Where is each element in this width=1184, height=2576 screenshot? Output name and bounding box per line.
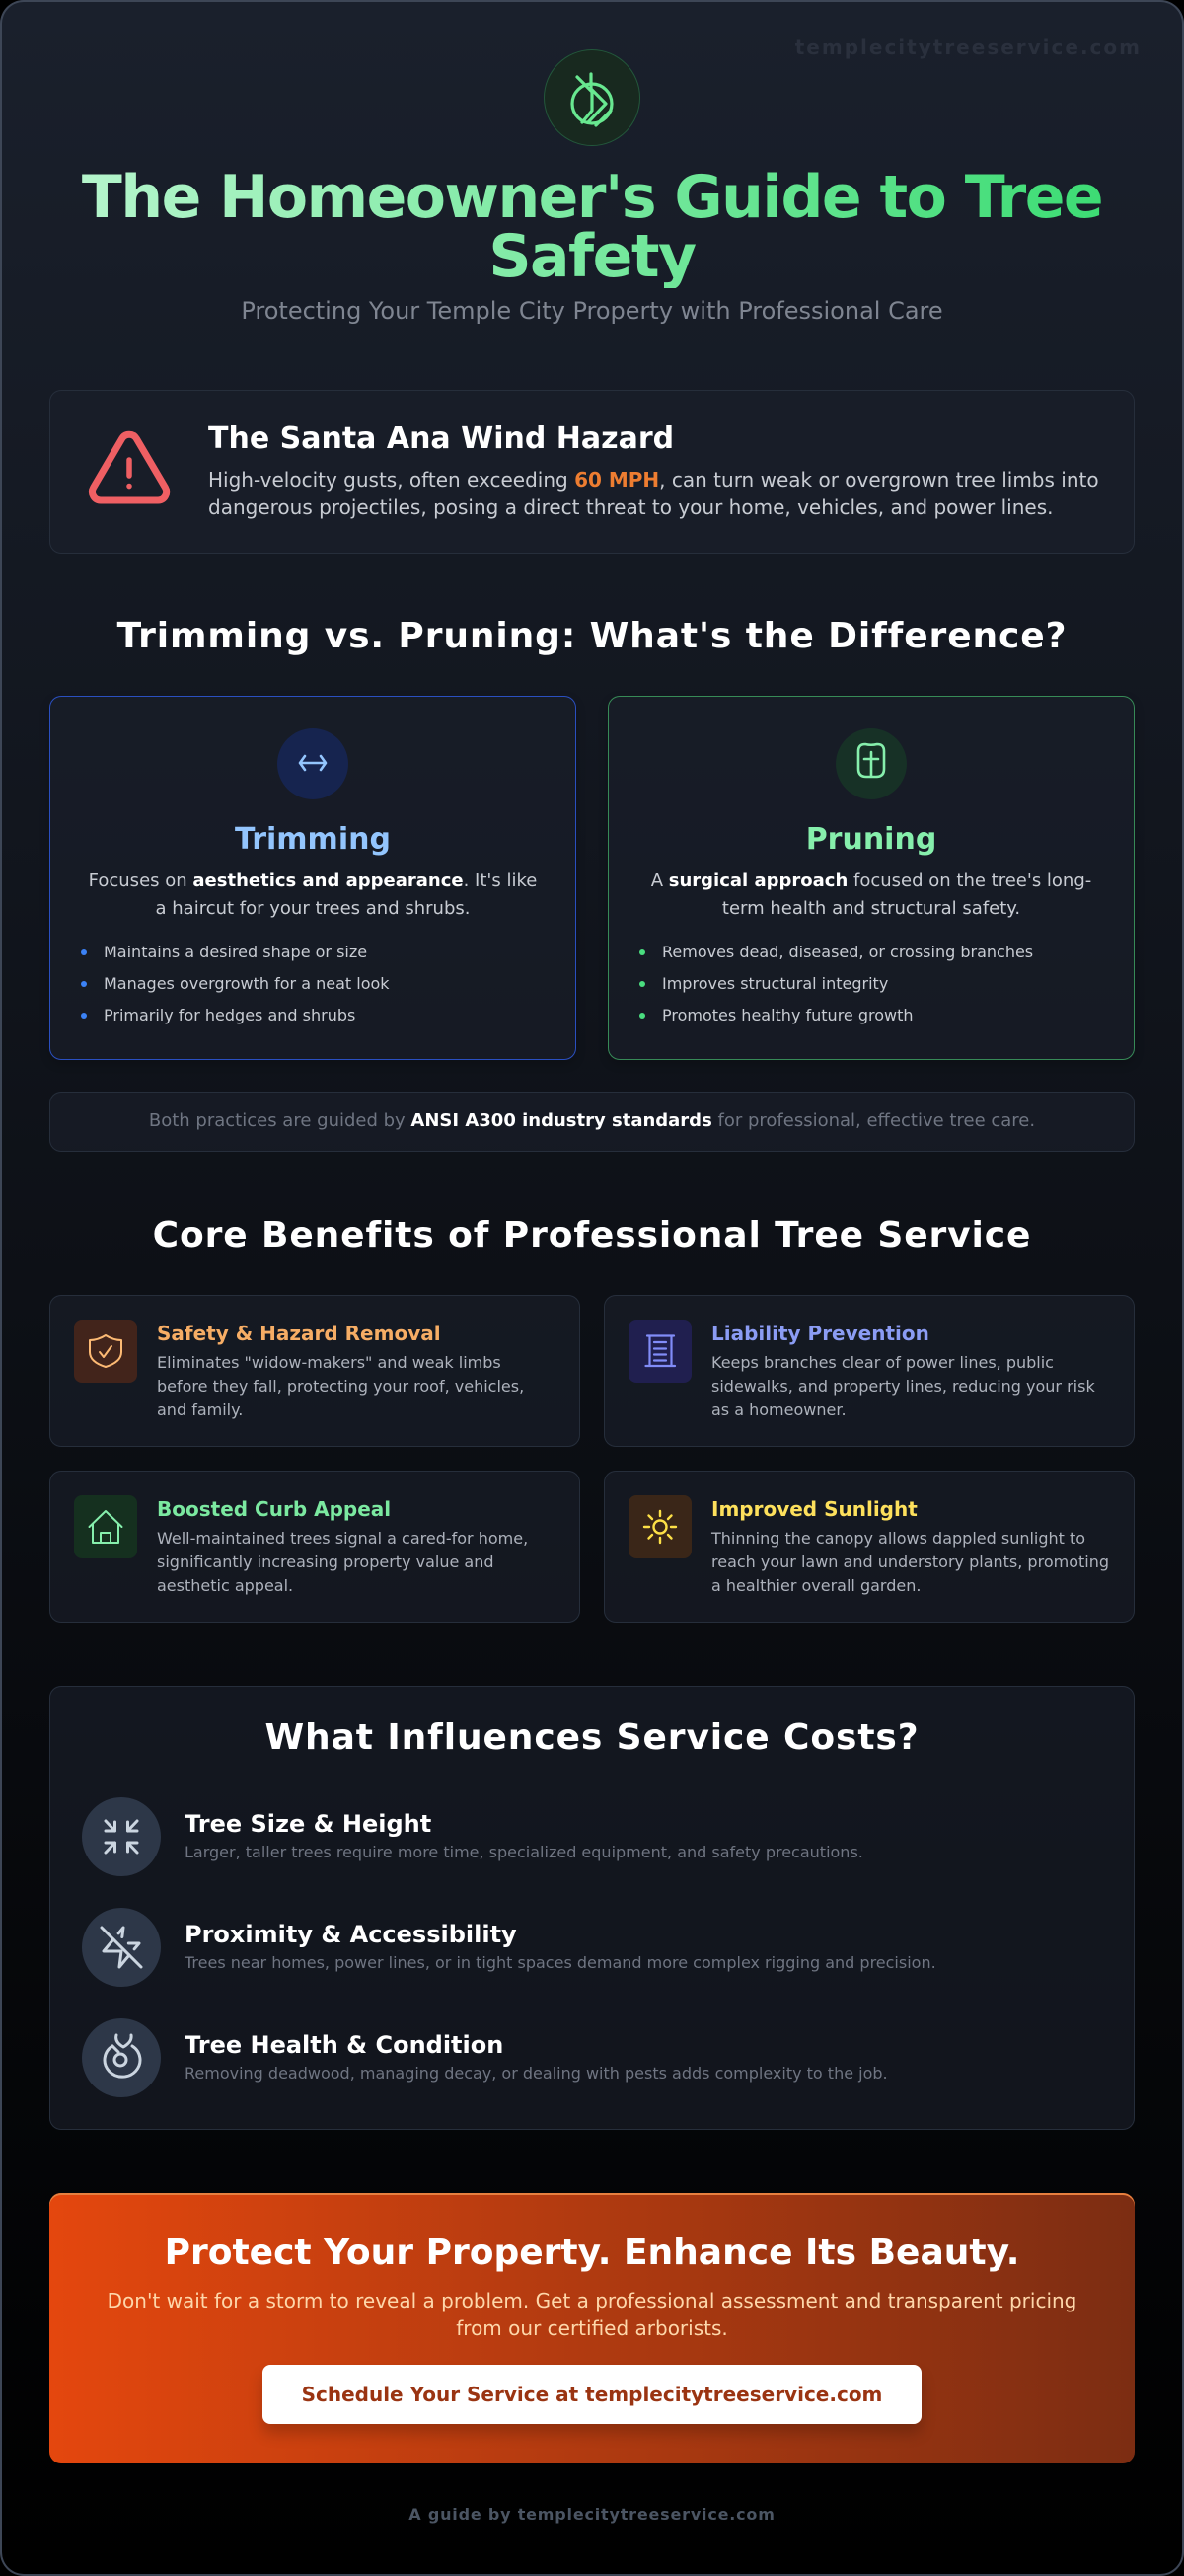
CTA button (262, 2365, 922, 2424)
alert text: High-velocity gusts, often exceeding 60 MPH, can turn weak or overgrown tree limbs into (208, 468, 1099, 492)
benefit text (710, 1529, 1109, 1595)
panel: improved sunlight (604, 1471, 1135, 1623)
trimming list: Manages overgrowth for a neat look (104, 974, 390, 993)
title (0, 168, 1184, 288)
benefit text: Keeps branches clear of power lines, public (711, 1353, 1054, 1372)
pruning list (639, 943, 1033, 1024)
pruning list: Removes dead, diseased, or crossing branches (662, 943, 1033, 961)
benefit text: sidewalks, and property lines, reducing your risk (711, 1377, 1095, 1396)
alert text (208, 468, 1099, 519)
factor text: Larger, taller trees require more time, specialized equipment, and safety precautions. (185, 1843, 863, 1861)
benefit text: a healthier overall garden. (711, 1576, 921, 1595)
alert text: dangerous projectiles, posing a direct threat to your home, vehicles, and power lines. (208, 495, 1053, 519)
benefit heading: Liability Prevention (711, 1322, 929, 1345)
benefit heading: Improved Sunlight (711, 1497, 918, 1521)
icon: shrink arrows (82, 1797, 161, 1876)
benefit text: aesthetic appeal. (157, 1576, 293, 1595)
icon: logo badge (544, 49, 640, 146)
icon: warning triangle (89, 430, 170, 503)
subtitle: Protecting Your Temple City Property with Professional Care (241, 297, 943, 325)
benefit text: and family. (157, 1401, 243, 1419)
icon: house (74, 1495, 137, 1558)
trimming heading: Trimming (235, 822, 391, 857)
icon: document column (629, 1320, 692, 1383)
factor heading: Tree Health & Condition (185, 2031, 503, 2059)
note text: Both practices are guided by ANSI A300 industry standards for professional, effective tree care. (149, 1110, 1035, 1131)
title: The Homeowner's Guide to Tree (82, 163, 1102, 232)
pruning description (651, 871, 1091, 919)
icon: trimming arrows (277, 728, 348, 799)
panel: safety and hazard removal (49, 1295, 580, 1447)
trimming description: a haircut for your trees and shrubs. (156, 898, 470, 919)
panel: Santa Ana wind hazard (49, 390, 1135, 554)
panel: call to action (49, 2193, 1135, 2463)
trimming list: Maintains a desired shape or size (104, 943, 367, 961)
title: Safety (488, 222, 696, 291)
benefit heading: Boosted Curb Appeal (157, 1497, 391, 1521)
icon: tree health (82, 2018, 161, 2097)
CTA text: Don't wait for a storm to reveal a problem. Get a professional assessment and transparent pricing (108, 2289, 1076, 2312)
benefit text: significantly increasing property value and (157, 1553, 494, 1571)
panel: ANSI standards note (49, 1092, 1135, 1152)
CTA button: Schedule Your Service at templecitytreeservice.com (302, 2383, 882, 2406)
panel: boosted curb appeal (49, 1471, 580, 1623)
benefit text (157, 1353, 524, 1419)
footer: A guide by templecitytreeservice.com (408, 2505, 776, 2524)
heading: core benefits: Core Benefits of Professional Tree Service (153, 1215, 1031, 1255)
alert heading: The Santa Ana Wind Hazard (208, 421, 674, 456)
CTA text (108, 2289, 1076, 2340)
icon: pruning (836, 728, 907, 799)
pruning list: Improves structural integrity (662, 974, 888, 993)
factor heading: Tree Size & Height (185, 1810, 431, 1838)
icon: sun (629, 1495, 692, 1558)
factor heading: Proximity & Accessibility (185, 1921, 517, 1948)
watermark: templecitytreeservice.com (795, 36, 1142, 59)
trimming list: Primarily for hedges and shrubs (104, 1006, 355, 1024)
benefit text: before they fall, protecting your roof, vehicles, (157, 1377, 524, 1396)
factor text: Removing deadwood, managing decay, or dealing with pests adds complexity to the job. (185, 2064, 888, 2083)
trimming description: Focuses on aesthetics and appearance. It's like (89, 871, 537, 891)
cost factor: tree size (82, 1797, 863, 1876)
panel: service costs (49, 1686, 1135, 2130)
CTA text: from our certified arborists. (456, 2316, 728, 2340)
pruning heading: Pruning (806, 822, 936, 857)
heading: service costs: What Influences Service Costs? (264, 1717, 920, 1758)
panel: pruning (608, 696, 1135, 1060)
pruning description: A surgical approach focused on the tree's long- (651, 871, 1091, 891)
CTA heading: Protect Your Property. Enhance Its Beauty. (165, 2233, 1019, 2273)
heading: trimming vs pruning: Trimming vs. Pruning: What's the Difference? (117, 616, 1067, 656)
cost factor: tree health (82, 2018, 888, 2097)
header (82, 49, 1102, 325)
benefit text (157, 1529, 528, 1595)
benefit heading: Safety & Hazard Removal (157, 1322, 441, 1345)
panel: trimming (49, 696, 576, 1060)
pruning description: term health and structural safety. (722, 898, 1020, 919)
benefit text: reach your lawn and understory plants, promoting (711, 1553, 1109, 1571)
benefit text: Well-maintained trees signal a cared-for home, (157, 1529, 528, 1548)
trimming description (89, 871, 537, 919)
panel: liability prevention (604, 1295, 1135, 1447)
benefit text: Thinning the canopy allows dappled sunlight to (711, 1529, 1085, 1548)
benefit text (711, 1353, 1095, 1419)
cost factor: proximity (82, 1908, 936, 1987)
icon: shield (74, 1320, 137, 1383)
icon: crossed bolt (82, 1908, 161, 1987)
benefit text: as a homeowner. (711, 1401, 847, 1419)
pruning list: Promotes healthy future growth (662, 1006, 914, 1024)
benefit text: Eliminates "widow-makers" and weak limbs (157, 1353, 501, 1372)
factor text: Trees near homes, power lines, or in tight spaces demand more complex rigging and precision. (185, 1953, 936, 1972)
trimming list (81, 943, 390, 1024)
